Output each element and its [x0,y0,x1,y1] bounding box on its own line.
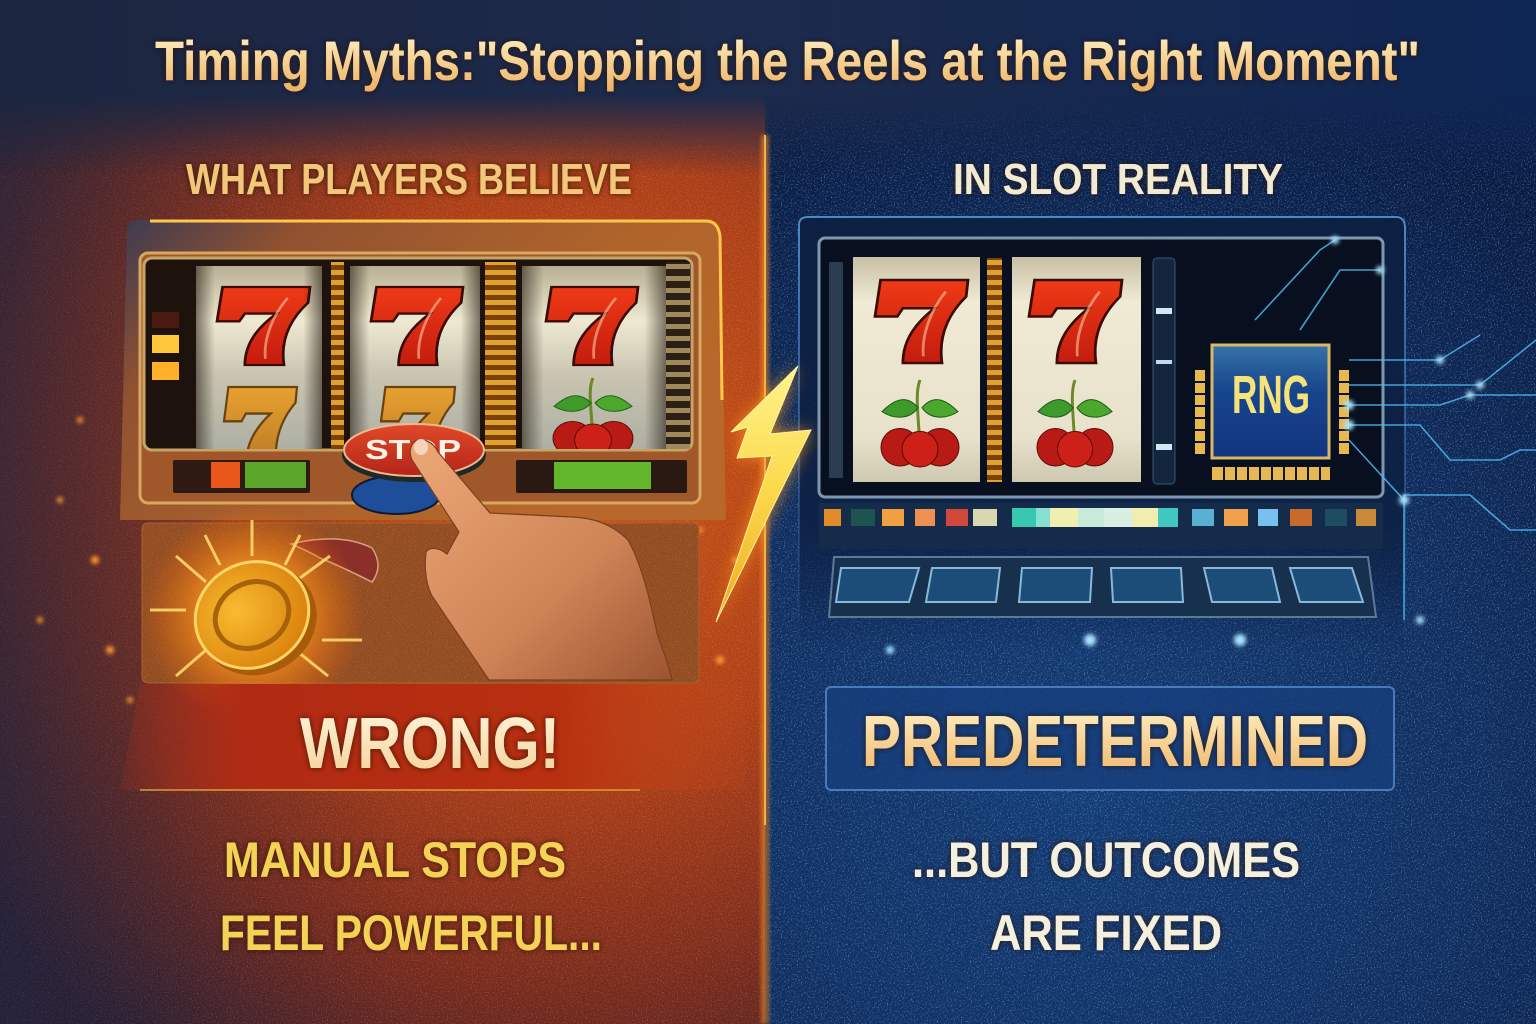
control key housing [829,557,1376,617]
gold strip [987,258,1002,482]
lightning bolt [716,366,811,622]
left caption [220,832,602,961]
side lights [152,312,179,380]
stop button: STOP [365,434,461,465]
reel 2 [1012,257,1141,482]
reel window [144,258,692,450]
right caption [912,832,1300,961]
PREDETERMINED banner [826,687,1394,790]
WRONG banner [120,684,745,791]
control keys [836,568,1363,602]
RNG chip [1195,345,1349,480]
lever slot [291,539,378,582]
panel: what players believe background [0,90,765,1024]
orange particles [37,417,738,703]
panel divider glow [761,135,769,1024]
cabinet glow [718,222,722,520]
stop button [342,424,486,514]
reel 2 [350,266,480,440]
banner text: WRONG! [300,704,560,784]
right caption: ...BUT OUTCOMES [912,832,1300,888]
control panel frame [140,253,700,503]
banner text: PREDETERMINED [862,702,1368,782]
reel 1 [853,257,980,482]
circuit board [1255,240,1536,620]
reel divider [1153,258,1175,484]
left strip [829,262,843,478]
right indicator [516,460,687,493]
left caption: FEEL POWERFUL... [220,905,602,961]
right caption: ARE FIXED [990,905,1222,961]
reel separators [331,262,690,449]
left caption: MANUAL STOPS [224,832,566,888]
slot machine: manual stop [120,220,726,683]
cabinet top highlight [150,221,722,400]
status lights row [819,503,1383,549]
right heading: IN SLOT REALITY [953,155,1283,204]
hand pressing stop [410,439,672,680]
reel 1 [196,266,322,465]
left heading: WHAT PLAYERS BELIEVE [186,155,632,204]
slot machine: digital reality [799,217,1536,650]
panel: slot reality background [768,90,1536,1024]
coin with sparks [143,505,363,725]
circuit glow nodes [886,236,1484,654]
machine cabinet [120,220,726,520]
digital cabinet [799,217,1405,650]
RNG chip: RNG [1232,365,1310,425]
reel 3 [522,266,666,456]
reel window [819,238,1383,497]
left indicator [173,460,310,493]
lower panel [142,523,699,683]
